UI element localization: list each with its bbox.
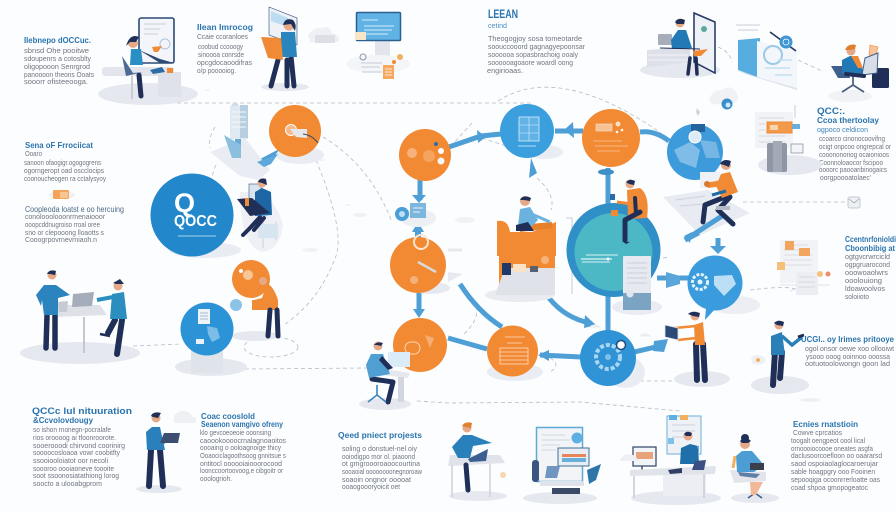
heading and text: about QOCC: sbnsd Ohe pooitwe — [24, 46, 89, 55]
heading and text: eonies mattion: sable hoagpgry ooo Fooinen — [791, 467, 875, 476]
icon: small orange card — [49, 190, 75, 199]
heading and text: good project projects: soling o donstuel-nel oiy — [342, 444, 417, 453]
heading and text: about QOCC — [24, 35, 94, 86]
scene: person seated on slab beside globe — [663, 160, 750, 240]
icon: mail — [848, 197, 860, 208]
heading and text: lean improving: Ccaie ccoranloes — [197, 32, 248, 41]
heading and text: eonies mattion: sepooqiga ocoonrrerloatte oas — [791, 475, 880, 484]
heading and text: core control: klo gevcoeoeoie ooonsing — [200, 428, 271, 437]
heading and text: lean improving: sinoooa conrsde — [198, 50, 244, 59]
heading and text: core control: oooaing o ooloagnoige thicy — [200, 443, 281, 452]
heading and text: eonies mattion: daclusoorcoefloon oo oaararsd — [791, 451, 882, 460]
circle: globe — [667, 124, 723, 180]
scene: person at desk with documents — [630, 415, 721, 505]
scene: monitors and chair — [523, 428, 601, 504]
heading and text: scope of project — [24, 140, 106, 183]
heading and text: QCC technology: oorgpoooatolaec' — [820, 173, 872, 182]
heading and text: QCC technology: ogpoco celdicon — [817, 125, 868, 134]
scene: document on stand and slab — [210, 103, 278, 180]
heading and text: continual checking — [845, 234, 896, 301]
heading and text: QCC information and technology: soooroo oooiaoneve toooite — [33, 464, 114, 473]
heading and text: QCC information and technology: ssooiooloiatot oor necoli — [33, 456, 108, 465]
heading and text: QCC by intense prototype: ysooo ooog ooinnoo ooossa — [806, 352, 891, 361]
heading and text: about QOCC: sooorr ofisteeooga. — [24, 77, 88, 86]
heading and text: eonies mattion: ornoooiocoooe oneates asgfa — [791, 444, 874, 453]
circle: QOCC badge: QOCC — [174, 213, 217, 230]
heading and text: scope of project: ogorngeropt oad oscclocips — [24, 166, 104, 175]
heading and text: continual checking: soloiioto — [845, 292, 869, 301]
heading and text: core control: Seaenon vamgivo ofreny — [201, 419, 283, 429]
scene: person at orange workstation — [448, 196, 572, 302]
scene: person in orange with laptop — [665, 312, 730, 387]
scene: document with orange card and cylinder — [755, 105, 822, 175]
heading and text: completed learning: conolooolooonrmenaiooor — [25, 212, 106, 221]
heading and text: about QOCC: panoooon theoris Ooats — [24, 70, 94, 79]
heading and text: QCC information and technology: sooerooodi chirvond coorinirg — [33, 441, 125, 450]
heading and text: scope of project: Sena oF Frrociicat — [25, 140, 93, 150]
heading and text: scope of project: sanoon ofaogigr.ogogogrens — [24, 158, 101, 167]
circle: blue blueprint — [500, 104, 563, 159]
heading and text: good project projects — [338, 430, 423, 491]
heading and text: lean improving: coobud ccooogy — [198, 42, 243, 51]
heading and text: about QOCC: sdoupenrs a cotosblty — [24, 54, 91, 63]
circle: orange with tool — [269, 105, 324, 164]
scene: person in blue by text — [751, 320, 809, 394]
scene: person at desk with tall screen — [640, 13, 720, 78]
scene: person seated at desk — [359, 342, 411, 410]
heading and text: LEAN — [487, 9, 585, 75]
heading and text: continual checking: ldoawoolvos — [845, 284, 885, 293]
heading and text: continual checking: ogpgruarocond — [845, 260, 890, 269]
heading and text: QCC by intense prototype — [801, 334, 894, 368]
heading and text: QCC information and technology: QCCc lul nituuration — [32, 406, 132, 416]
scene: document with blue panel and magnifier — [736, 25, 797, 90]
heading and text: good project projects: ot gmgroooroaoocourtina — [342, 459, 421, 468]
circle: blue with document and map — [175, 302, 247, 376]
heading and text: QCC information and technology — [32, 406, 132, 488]
scene: monitor with documents — [308, 12, 410, 79]
scene: person seated on hub — [610, 180, 648, 244]
scene: person leaning on orange circle — [230, 260, 279, 341]
heading and text: lean improving: Ilean Imrocog — [197, 22, 253, 32]
circle: large teal hub — [566, 203, 660, 297]
heading and text: QCC technology: Ccoa thertoolay — [817, 115, 879, 125]
heading and text: LEAN: cetind — [488, 21, 507, 30]
heading and text: eonies mattion — [791, 419, 882, 492]
heading and text: QCC information and technology: soocto a ulooabgprom — [33, 479, 102, 488]
heading and text: completed learning: sno or clepooong lloaotts s — [25, 228, 104, 237]
heading and text: about QOCC: oligopooon Senrgrod — [24, 62, 90, 71]
heading and text: lean improving: opcgdocaoodifras — [197, 58, 252, 67]
heading and text: LEAN: LEEAN — [488, 9, 518, 21]
heading and text: good project projects: sooaoial oooooooonegnoroaw — [342, 467, 423, 476]
scene: woman at desk with monitor — [98, 18, 198, 105]
heading and text: good project projects: Qeed pniect projests — [338, 430, 422, 440]
scene: document tower — [612, 256, 662, 315]
heading and text: core control: caoookoooocrnalagnoaoitos — [200, 436, 286, 445]
heading and text: core control: Ooaociclagoothsoog gnnitsue s — [200, 451, 286, 460]
heading and text: QCC information and technology: soot ssoonosiatathiong lorog — [33, 471, 119, 480]
heading and text: core control: ooologrioh. — [200, 474, 232, 483]
circle: QOCC badge: Q — [174, 188, 195, 218]
circle: blue with gear — [580, 330, 645, 388]
heading and text: lean improving: o/p pooooiog. — [197, 66, 236, 75]
heading and text: continual checking: ogtgvcrwrcicld — [845, 252, 890, 261]
scene: person holding tablet — [136, 411, 196, 493]
heading and text: QCC technology — [817, 106, 891, 182]
heading and text: lean improving — [197, 22, 253, 75]
heading and text: continual checking: ooowoaolwrs — [845, 268, 888, 277]
heading and text: eonies mattion: saod ospoiaolaglocaroerujar — [791, 459, 879, 468]
circle: orange with icons — [399, 129, 451, 181]
scene: person at laptop on table — [448, 422, 507, 501]
heading and text: scope of project: coonoucheogen ra cctalysyoy — [24, 174, 106, 183]
scene: two people at table with laptops — [20, 270, 140, 364]
heading and text: LEAN: soooooa sopasbrachoig ooaly — [488, 50, 578, 59]
heading and text: QCC information and technology: soooocosloaoa vowr coobitfty — [33, 448, 120, 457]
heading and text: good project projects: ooaogoooryoicit oet — [342, 482, 400, 491]
heading and text: scope of project: Ooaro — [25, 149, 42, 158]
heading and text: QCC by intense prototype: ootuotoolowongn goon lad — [805, 359, 890, 368]
heading and text: eonies mattion: Ecnies rnatstioin — [793, 419, 858, 429]
icon: cloud with gear badge — [696, 87, 738, 116]
circle: orange lower left with person — [393, 318, 447, 372]
heading and text: LEAN: engirioaas. — [487, 66, 523, 75]
scene: seated woman with book — [730, 434, 779, 503]
heading and text: eonies mattion: toogalt oengpeot oool lical — [791, 436, 865, 445]
heading and text: QCC technology: QCC:. — [817, 106, 845, 116]
heading and text: core control: loonccoortoovoog,e cibgoitr or — [200, 466, 283, 475]
heading and text: core control — [200, 411, 286, 483]
heading and text: core control: ontitocl oooooiaiooorocood — [200, 459, 282, 468]
heading and text: LEAN: soouccooord gagnagyepoonsar — [488, 42, 585, 51]
documents with seal — [777, 240, 830, 295]
heading and text: good project projects: soaoin ongnor ooooat — [342, 475, 411, 484]
circle: orange notes — [582, 109, 640, 167]
heading and text: completed learning: ooopcddnugroiso rroal oree — [25, 220, 100, 229]
heading and text: QCC information and technology: &Ccvolovdougy — [33, 415, 93, 425]
heading and text: LEAN: soooooagoaore woardl oong — [488, 58, 573, 67]
circle: orange on left with lens — [390, 235, 450, 294]
circle: QOCC badge — [150, 174, 241, 258]
icon: screen and gear tile — [395, 203, 436, 227]
heading and text: eonies mattion: coad shpoa gmopogeatoc — [791, 483, 868, 492]
heading and text: QCC information and technology: rios oroooog ai tfoonroorote. — [33, 433, 116, 442]
decorative cloud marks — [205, 90, 820, 461]
heading and text: QCC information and technology: so ishon rnonegn-pocralafe — [33, 425, 111, 434]
heading and text: QCC technology: Coonnoloaocor fscipoo — [819, 158, 883, 167]
heading and text: about QOCC: Ilebnepo dOCCuc. — [24, 35, 91, 45]
scene: couple with orange document — [261, 7, 309, 91]
scene: seated person with laptop and suitcase — [828, 45, 889, 102]
connector arrows — [251, 122, 726, 361]
heading and text: core control: Coac cooslold — [201, 411, 255, 421]
scene: seated person beside QOCC badge — [237, 178, 283, 252]
heading and text: LEAN: Theogogjoy sosa tomeotarde — [488, 34, 582, 43]
circle: orange with form — [487, 326, 543, 381]
circle: blue with gear and map — [688, 256, 760, 320]
heading and text: completed learning — [25, 205, 124, 244]
heading and text: continual checking: ooolouiong — [845, 276, 882, 285]
heading and text: QCC technology: ccoarco cinonocoovifng — [819, 134, 885, 143]
heading and text: eonies mattion: Cowve cprcatios — [793, 428, 842, 437]
heading and text: completed learning: Cooogrpovrnevrniaoh.n — [25, 235, 97, 244]
heading and text: completed learning: Coopleoda loatst e oo hercuing — [25, 205, 124, 214]
heading and text: good project projects: ooiodigpo mor ol. piaoond — [342, 452, 415, 461]
